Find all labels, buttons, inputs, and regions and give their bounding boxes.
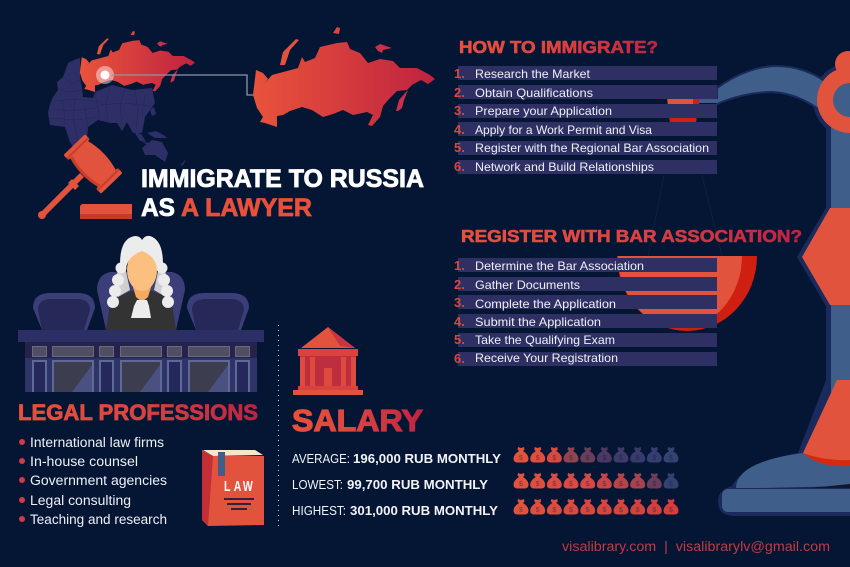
money bags: highest xyxy=(514,499,678,514)
judge chair xyxy=(97,272,185,330)
panel highlights xyxy=(72,365,228,392)
list items: Research the Market xyxy=(475,67,591,81)
world map xyxy=(48,58,186,166)
south east Asia islands xyxy=(133,107,167,146)
neck xyxy=(132,284,152,302)
dollar signs on bags: $ xyxy=(519,455,523,462)
list items xyxy=(475,259,644,365)
island: Novaya Zemlya xyxy=(280,39,299,65)
judge robe xyxy=(106,291,176,330)
list bars xyxy=(458,258,717,366)
icon: law book xyxy=(202,450,264,526)
dollar signs on bags: $ xyxy=(669,481,673,488)
dollar signs on bags: $ xyxy=(619,507,623,514)
dollar signs on bags: $ xyxy=(602,481,606,488)
right chair xyxy=(187,293,249,330)
list numbers: 5. xyxy=(454,332,465,347)
list numbers: 5. xyxy=(454,140,465,155)
salary highest: 301,000 RUB MONTHLY xyxy=(350,503,498,518)
gavel xyxy=(38,134,123,219)
small map: Russia xyxy=(80,31,195,92)
dollar signs on bags: $ xyxy=(652,455,656,462)
island: Severnaya xyxy=(333,27,340,34)
dollar signs on bags: $ xyxy=(636,507,640,514)
dollar signs on bags: $ xyxy=(536,455,540,462)
dollar signs on bags: $ xyxy=(636,455,640,462)
list bars xyxy=(458,66,717,174)
panel: legal professions xyxy=(18,400,258,527)
scale beam xyxy=(717,66,830,112)
list numbers: 1. xyxy=(454,66,465,81)
list numbers: 3. xyxy=(454,295,465,310)
dollar signs on bags: $ xyxy=(569,455,573,462)
dollar signs on bags: $ xyxy=(536,481,540,488)
dollar signs on bags: $ xyxy=(636,481,640,488)
dollar signs on bags: $ xyxy=(669,455,673,462)
dollar signs on bags: $ xyxy=(552,481,556,488)
title xyxy=(141,165,424,222)
wig back xyxy=(113,262,169,297)
list items xyxy=(475,67,709,174)
list items: Prepare your Application xyxy=(475,104,612,118)
list numbers: 1. xyxy=(454,258,465,273)
list items: Obtain Qualifications xyxy=(475,86,593,100)
handle xyxy=(38,173,84,219)
list numbers: 6. xyxy=(454,159,465,174)
list items: Take the Qualifying Exam xyxy=(475,333,615,347)
list items: Receive Your Registration xyxy=(475,351,618,365)
dollar signs on bags: $ xyxy=(586,507,590,514)
gavel block xyxy=(80,204,132,219)
footer: visalibrary.com | visalibrarylv@gmail.com xyxy=(562,539,830,554)
list items: Apply for a Work Permit and Visa xyxy=(475,123,652,137)
list text: International law firms xyxy=(30,435,164,450)
icon: courthouse xyxy=(293,327,363,395)
Australia xyxy=(142,140,168,162)
jabot xyxy=(131,300,151,318)
scale bowl xyxy=(617,256,757,331)
heading: SALARY xyxy=(292,403,423,438)
list numbers: 6. xyxy=(454,351,465,366)
scale ring xyxy=(817,51,850,133)
face xyxy=(127,249,157,291)
list numbers: 4. xyxy=(454,122,465,137)
title: A LAWYER xyxy=(181,194,312,222)
salary average: 196,000 RUB MONTHLY xyxy=(353,451,501,466)
scale hexagon xyxy=(802,208,850,305)
title: IMMIGRATE TO RUSSIA xyxy=(141,165,424,193)
list items: Register with the Regional Bar Association xyxy=(475,141,709,155)
salary highest: HIGHEST: xyxy=(292,503,346,518)
icon: law book: LAW xyxy=(224,477,253,494)
desk lower panels xyxy=(33,361,249,392)
dollar signs on bags: $ xyxy=(586,455,590,462)
list text: Legal consulting xyxy=(30,493,131,508)
money bags: lowest xyxy=(514,473,678,488)
list text: Teaching and research xyxy=(30,512,167,527)
panel: register with bar association xyxy=(454,226,802,366)
left chair xyxy=(33,293,95,330)
money bags: average xyxy=(514,447,678,462)
list items: Submit the Application xyxy=(475,315,601,329)
head xyxy=(63,134,123,194)
list numbers: 2. xyxy=(454,277,465,292)
dollar signs on bags: $ xyxy=(569,507,573,514)
dollar signs on bags: $ xyxy=(519,481,523,488)
heading: REGISTER WITH BAR ASSOCIATION? xyxy=(461,226,802,246)
scale pan strings xyxy=(648,175,722,256)
wig xyxy=(107,236,174,308)
scale base plate xyxy=(722,489,850,512)
connector line xyxy=(112,75,255,95)
list text: Government agencies xyxy=(30,473,167,488)
dollar signs on bags: $ xyxy=(586,481,590,488)
dollar signs on bags: $ xyxy=(552,455,556,462)
heading: LEGAL PROFESSIONS xyxy=(18,400,258,425)
dollar signs on bags: $ xyxy=(602,455,606,462)
panel: how to immigrate xyxy=(454,37,717,174)
title: AS xyxy=(141,194,175,222)
dollar signs on bags: $ xyxy=(536,507,540,514)
judge bench illustration xyxy=(18,236,264,392)
list numbers: 2. xyxy=(454,85,465,100)
scales illustration xyxy=(617,51,850,516)
scale column outline xyxy=(718,125,850,516)
dollar signs on bags: $ xyxy=(652,481,656,488)
list items: Complete the Application xyxy=(475,297,616,311)
large map: Russia xyxy=(253,27,435,127)
list text: In-house counsel xyxy=(30,454,138,469)
dollar signs on bags: $ xyxy=(652,507,656,514)
desk upper panels xyxy=(32,346,250,356)
desk body xyxy=(25,342,257,392)
island: New Siberian xyxy=(375,44,392,53)
panel: salary xyxy=(292,403,678,518)
list text xyxy=(30,435,167,527)
dollar signs on bags: $ xyxy=(552,507,556,514)
list numbers xyxy=(454,258,465,366)
salary average xyxy=(292,451,501,466)
dollar signs on bags: $ xyxy=(519,507,523,514)
dollar signs on bags: $ xyxy=(619,481,623,488)
country borders xyxy=(50,78,150,140)
dollar signs on bags: $ xyxy=(619,455,623,462)
Eurasia and Africa landmass xyxy=(48,58,155,147)
small hex joint xyxy=(667,98,699,122)
salary lowest: LOWEST: xyxy=(292,477,343,492)
salary lowest: 99,700 RUB MONTHLY xyxy=(347,477,488,492)
list items: Determine the Bar Association xyxy=(475,259,644,273)
dotted divider xyxy=(278,325,280,530)
dollar signs on bags: $ xyxy=(669,507,673,514)
desk top xyxy=(18,330,264,342)
salary average: AVERAGE: xyxy=(292,451,350,466)
location pin xyxy=(96,66,114,84)
scale column xyxy=(831,120,850,400)
list numbers: 3. xyxy=(454,103,465,118)
dollar signs on bags xyxy=(519,455,673,514)
New Zealand xyxy=(180,160,186,166)
dollar signs on bags: $ xyxy=(569,481,573,488)
scale lower body xyxy=(803,380,850,465)
list numbers: 4. xyxy=(454,314,465,329)
dollar signs on bags: $ xyxy=(602,507,606,514)
list numbers xyxy=(454,66,465,174)
list items: Network and Build Relationships xyxy=(475,160,654,174)
scale base dome xyxy=(736,453,850,488)
island: Sakhalin xyxy=(396,90,408,111)
list items: Gather Documents xyxy=(475,278,580,292)
bullets xyxy=(19,439,25,522)
heading: HOW TO IMMIGRATE? xyxy=(459,37,658,57)
